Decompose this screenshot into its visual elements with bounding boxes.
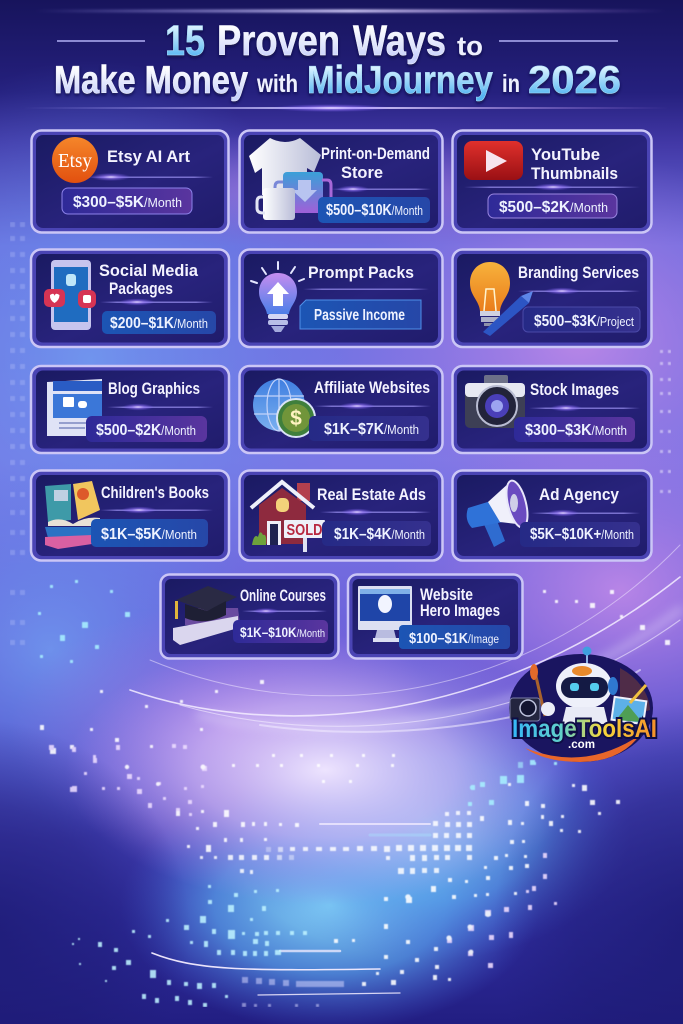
- icon: t-shirt and mugs: [249, 138, 331, 220]
- earnings pill: [399, 625, 510, 649]
- earnings pill: [514, 417, 635, 442]
- heading: Real Estate Ads: [317, 485, 426, 504]
- title: MidJourney: [307, 59, 493, 102]
- panel: Prompt Packs: [240, 250, 442, 347]
- heading: Prompt Packs: [308, 263, 414, 282]
- icon: house with sold sign: SOLD: [286, 522, 322, 539]
- earnings pill: $1K–$4K/Month: [334, 526, 425, 543]
- divider: [107, 404, 213, 410]
- heading: Social Media: [99, 261, 199, 280]
- title: Ways: [353, 17, 446, 65]
- earnings pill: [318, 197, 430, 223]
- icon: Etsy badge: [52, 137, 98, 183]
- logo: ImageToolsAI robot: [509, 646, 657, 762]
- divider: [100, 506, 213, 514]
- icon: globe and dollar coin: [253, 379, 315, 437]
- earnings pill: [233, 620, 328, 643]
- earnings pill: $1K–$5K/Month: [101, 526, 197, 543]
- panel: Blog Graphics: [31, 366, 229, 453]
- heading: Store: [341, 163, 383, 182]
- divider: [464, 184, 640, 190]
- label pill: Passive Income: [314, 307, 405, 324]
- panel: Etsy AI Art: [32, 130, 228, 232]
- panel: Social Media Packages: [31, 250, 229, 347]
- earnings pill: [102, 311, 216, 334]
- heading: Affiliate Websites: [314, 378, 430, 397]
- heading: Children's Books: [101, 483, 209, 502]
- title side line left: [57, 40, 145, 42]
- earnings pill: [62, 188, 192, 214]
- heading: Online Courses: [240, 586, 326, 605]
- heading: Etsy AI Art: [107, 147, 190, 166]
- earnings pill: [86, 416, 207, 442]
- panel: Website Hero Images: [348, 574, 522, 658]
- title: 15: [165, 17, 205, 65]
- earnings pill: [523, 307, 640, 332]
- icon: phone with reactions: [44, 260, 96, 330]
- icon: megaphone: [467, 479, 532, 547]
- earnings pill: $5K–$10K+/Month: [530, 526, 634, 543]
- earnings pill: [520, 522, 640, 547]
- icon: light bulb with arrow: [251, 262, 304, 332]
- title: 2026: [528, 59, 621, 102]
- panel: Affiliate Websites: [240, 366, 442, 453]
- panel: Online Courses: [160, 574, 338, 658]
- earnings pill: [488, 194, 617, 218]
- divider: [100, 298, 213, 306]
- icon: blog page: [47, 379, 102, 436]
- title: to: [457, 31, 483, 61]
- heading: Hero Images: [420, 601, 500, 620]
- divider: [531, 510, 640, 516]
- title side line right: [499, 40, 618, 42]
- icon: stack of books: [45, 481, 100, 549]
- icon: orange bulb and pen: [470, 262, 533, 336]
- logo text: ImageToolsAI: [512, 715, 657, 743]
- title: in: [502, 70, 520, 98]
- heading: Packages: [109, 279, 173, 298]
- divider: [518, 288, 640, 294]
- panel: Ad Agency: [452, 470, 652, 560]
- divider under title: [22, 104, 670, 112]
- panel: Children's Books: [31, 470, 229, 560]
- panel: Stock Images: [452, 366, 652, 453]
- icon: monitor: [358, 586, 412, 642]
- divider: [331, 186, 431, 192]
- earnings pill: $500–$2K/Month: [96, 422, 196, 439]
- heading: Print-on-Demand: [321, 144, 430, 163]
- icon: camera: [465, 375, 525, 428]
- panel: Branding Services: [452, 250, 652, 347]
- icon: graduation cap and books: [173, 586, 240, 645]
- icon: house with sold sign: [251, 482, 325, 552]
- title: [54, 17, 621, 102]
- divider: [303, 288, 429, 290]
- earnings pill: [309, 416, 429, 441]
- logo text: .com: [568, 737, 595, 751]
- panel: Real Estate Ads: [240, 470, 442, 560]
- icon: robot: [530, 646, 618, 724]
- panel: YouTube Thumbnails: [452, 130, 652, 232]
- divider: [529, 404, 640, 412]
- icon: picture and pen: [611, 685, 646, 724]
- earnings pill: $1K–$7K/Month: [324, 421, 419, 438]
- heading: YouTube: [531, 145, 600, 164]
- icon: camera: [510, 698, 540, 721]
- divider: [314, 402, 431, 410]
- divider: [242, 608, 327, 614]
- heading: Website: [420, 585, 473, 604]
- light swooshes: [130, 545, 680, 995]
- title: with: [256, 70, 298, 98]
- heading: Stock Images: [530, 380, 619, 399]
- earnings pill: $200–$1K/Month: [110, 315, 208, 332]
- earnings pill: $500–$2K/Month: [499, 199, 608, 216]
- heading: Branding Services: [518, 263, 639, 282]
- heading: [420, 585, 500, 620]
- heading: Thumbnails: [531, 164, 618, 183]
- divider: [320, 508, 431, 516]
- earnings pill: $500–$3K/Project: [534, 313, 634, 330]
- heading: Blog Graphics: [108, 379, 200, 398]
- earnings pill: $500–$10K/Month: [326, 202, 423, 219]
- heading: [531, 145, 618, 183]
- icon: globe and dollar coin: $: [290, 407, 302, 430]
- icon: Etsy badge: Etsy: [58, 150, 92, 172]
- earnings pill: $100–$1K/Image: [409, 631, 499, 647]
- earnings pill: [322, 521, 431, 546]
- top decorative line: [35, 10, 666, 12]
- title: Proven: [217, 17, 340, 65]
- title: Make Money: [54, 59, 248, 102]
- heading: [321, 144, 430, 182]
- earnings pill: $300–$5K/Month: [73, 194, 182, 211]
- earnings pill: $1K–$10K/Month: [240, 624, 325, 640]
- dotted particles: [10, 222, 671, 1007]
- heading: Ad Agency: [539, 485, 619, 504]
- heading: [99, 261, 199, 298]
- icon: YouTube: [464, 141, 523, 180]
- panel: Print-on-Demand Store: [240, 130, 442, 232]
- label pill: [300, 300, 421, 329]
- earnings pill: $300–$3K/Month: [525, 422, 627, 439]
- earnings pill: [91, 519, 208, 547]
- divider: [87, 173, 213, 181]
